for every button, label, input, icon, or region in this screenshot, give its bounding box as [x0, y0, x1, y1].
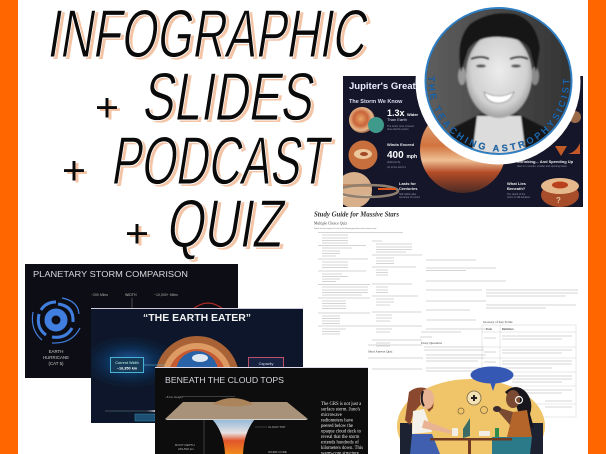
panel: Jupiter infographic: Shrinking... And Speeding Up [517, 159, 574, 164]
panel: Jupiter infographic: The depth of the [507, 193, 526, 196]
slide: planetary storm comparison: PLANETARY STORM COMPARISON [33, 269, 188, 279]
slide: planetary storm comparison: ~200 Miles [91, 293, 108, 297]
central Jupiter [420, 125, 504, 193]
document: study guide: Study Guide for Massive Stars [314, 212, 399, 218]
panel: Jupiter infographic: 1.3x Wider [387, 108, 419, 118]
portrait badge [416, 7, 580, 164]
funnel cross-section [212, 419, 255, 454]
slide: planetary storm comparison: HURRICANE [43, 355, 69, 360]
slide: planetary storm comparison: EARTH [49, 349, 63, 354]
title: infographic + slides + podcast + quiz [44, 0, 377, 264]
panel: Jupiter infographic: three Earths across [387, 128, 409, 131]
explanation text: opaque cloud deck to [321, 430, 362, 434]
left woman [400, 388, 452, 454]
yellow backdrop [397, 379, 545, 454]
title shadow: INFOGRAPHIC [47, 0, 377, 74]
hurricane icon [32, 298, 80, 343]
title text: + [95, 86, 119, 130]
title shadow: + [98, 88, 122, 132]
title text: + [62, 149, 86, 193]
right woman [492, 387, 543, 454]
slide: beneath the cloud tops [155, 367, 368, 454]
title text: QUIZ [163, 186, 291, 262]
panel: Jupiter infographic: (640 km/h) [387, 160, 400, 164]
circular label: THE TEACHING ASTROPHYSICIST [428, 76, 570, 152]
panel: Jupiter infographic: What Lies [507, 181, 527, 186]
title shadow: QUIZ [166, 188, 294, 264]
capacity callout: Capacity [259, 362, 273, 366]
slide: beneath the cloud tops: WARM CORE [268, 450, 287, 454]
swirling storm icon [348, 140, 378, 170]
explanation text: kilometers down. This [321, 446, 363, 451]
panel: Jupiter infographic: 400 mph [387, 150, 417, 161]
explanation text [321, 402, 363, 454]
width callout [110, 358, 144, 372]
explanation text: extends hundreds of [321, 440, 359, 446]
panel: Jupiter infographic: Jupiter's Great [349, 81, 417, 92]
panel: Jupiter infographic: centuries of record [399, 196, 420, 199]
panel: Jupiter infographic: Still visible after [399, 193, 417, 196]
slide: planetary storm comparison: ~10,000+ Miles [154, 293, 178, 297]
capacity callout [248, 357, 284, 367]
title shadow [47, 0, 377, 264]
document: study guide: Glossary of Key Terms [483, 320, 513, 324]
panel: Jupiter infographic: The storm once covered [387, 125, 415, 128]
document: study guide: Multiple Choice Quiz [314, 222, 347, 226]
explanation text: radiometers have [321, 418, 353, 424]
cloud deck terrain [165, 398, 308, 420]
panel: Jupiter infographic: storm is still debated [507, 196, 530, 199]
panel: Jupiter infographic: Now it is rounder, smaller and spinning faster [517, 165, 567, 168]
glossary table: Definition [502, 328, 514, 331]
explanation text: The GRS is not just a [321, 402, 362, 407]
document: study guide: Essay Questions [421, 341, 443, 345]
speech bubble [470, 366, 514, 391]
title text [44, 0, 374, 262]
small chart icons [555, 111, 581, 156]
slide: the earth eater [75, 308, 303, 423]
explanation text: surface storm. Juno's [321, 408, 360, 412]
document: study guide [314, 212, 578, 417]
title text: SLIDES [139, 59, 321, 135]
document: study guide: Short Answer Quiz [368, 350, 393, 354]
glossary table [482, 325, 576, 417]
sound-wave icons [458, 391, 488, 414]
title shadow: + [65, 151, 89, 195]
panel: Jupiter infographic [336, 76, 583, 208]
panel: Jupiter infographic: The Storm We Know [349, 99, 403, 105]
panel: Jupiter infographic: Winds Exceed [387, 142, 415, 147]
slide: planetary storm comparison: (CAT 5) [49, 361, 64, 366]
width callout: Current Width [115, 361, 139, 365]
title text: PODCAST [108, 123, 336, 199]
slide: beneath the cloud tops: ROOT DEPTH [175, 443, 195, 447]
right orange border [588, 0, 606, 454]
panel: Jupiter infographic: Beneath? [507, 186, 526, 191]
title shadow: + [128, 214, 152, 258]
portrait photo [425, 8, 573, 156]
slide: beneath the cloud tops: 249-500 km [178, 447, 194, 451]
panel: Jupiter infographic: Lasts for [399, 181, 416, 186]
title shadow: PODCAST [111, 125, 339, 201]
plane icon and scale line [105, 410, 155, 422]
slide: beneath the cloud tops: ~8 km Height [165, 395, 183, 399]
table with objects [430, 418, 512, 454]
title shadow: SLIDES [142, 61, 324, 137]
illustration: podcast conversation [397, 379, 545, 454]
quiz columns [318, 232, 578, 371]
explanation text: microwave [321, 413, 342, 418]
left orange border [0, 0, 18, 454]
cutaway icon: ? [556, 196, 561, 205]
document: study guide: Select the best answer for each of the following questions about massive stars. [314, 227, 377, 230]
slide: planetary storm comparison: WIDTH [125, 293, 137, 297]
red storm arc [194, 302, 222, 308]
width callout: ~16,350 km [117, 366, 138, 370]
slide: the earth eater: “THE EARTH EATER” [143, 312, 251, 324]
cutaway icon [541, 178, 579, 207]
planet comparison icon [349, 107, 384, 133]
panel: Jupiter infographic: Centuries [399, 186, 418, 191]
title text: + [125, 212, 149, 256]
ringed planet icon [343, 172, 400, 207]
explanation text: reveal that the storm [321, 435, 360, 440]
explanation text: peered below the [321, 424, 353, 429]
slide: beneath the cloud tops: BENEATH THE CLOUD TOPS [165, 375, 284, 385]
slide: planetary storm comparison [25, 264, 238, 378]
panel: Jupiter infographic: Than Earth [387, 117, 407, 122]
slide: beneath the cloud tops: CLOUD TOP [268, 425, 285, 429]
Jupiter storm with Earth [156, 336, 238, 367]
glossary table: Term [486, 328, 493, 331]
panel: Jupiter infographic: Up to the storm's [387, 166, 407, 169]
